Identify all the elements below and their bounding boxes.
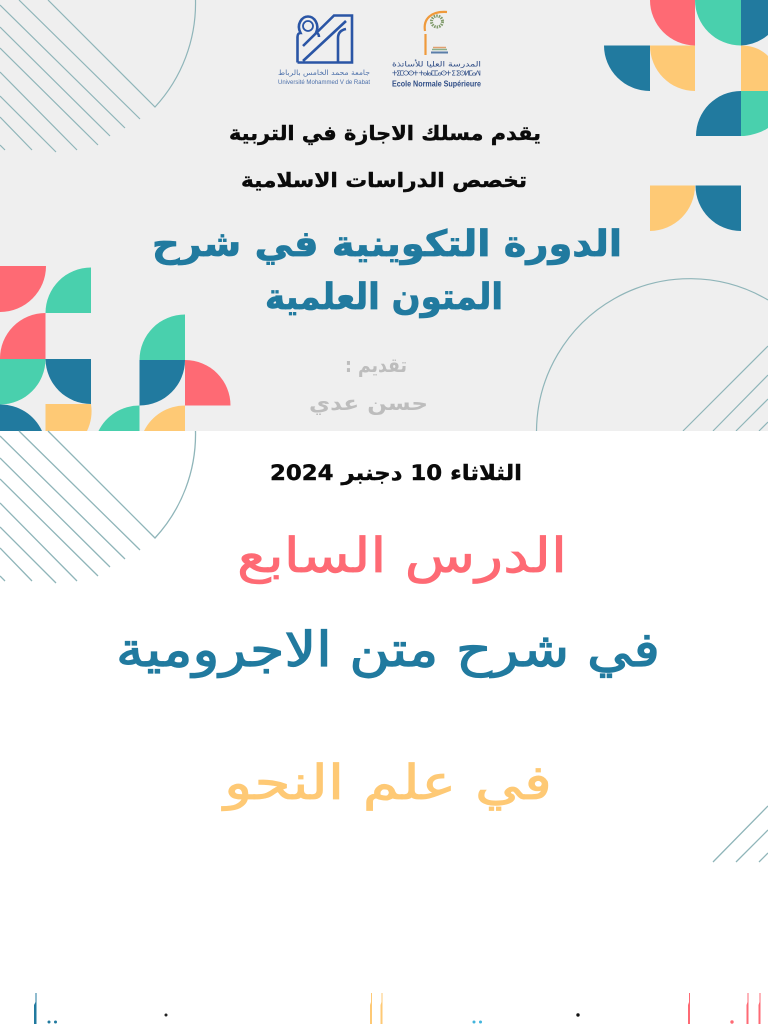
decoration: bottom-right circle and diagonal lines: [536, 279, 768, 431]
heading: seventh lesson: الدرس السابع: [237, 528, 567, 584]
text fragments: cropped next line at page bottom: [34, 993, 760, 1024]
logo mark: [298, 16, 352, 62]
logo French caption: Université Mohammed V de Rabat: [278, 79, 370, 86]
panel: lower white slide: [0, 431, 768, 1024]
decoration: top-right geometric quarter circles: [604, 0, 768, 231]
heading: Ajurrumiyya explanation: في شرح متن الاجرومية: [116, 622, 660, 678]
decoration: top-left circle and diagonal lines: [0, 0, 196, 152]
logo: Ecole Normale Supérieure: [392, 12, 481, 89]
logo French name: Ecole Normale Supérieure: [392, 80, 481, 88]
decoration: right diagonal lines: [713, 806, 768, 862]
text: presenter line 1: يقدم مسلك الاجازة في التربية: [229, 121, 541, 146]
decoration: centre-left geometric quarter circles: [98, 314, 230, 431]
logo Arabic caption: جامعة محمد الخامس بالرباط: [278, 69, 370, 77]
decoration: top-left circle and diagonal lines: [0, 431, 196, 583]
heading: training course title: [152, 224, 622, 318]
text: date: الثلاثاء 10 دجنبر 2024: [270, 461, 522, 485]
text: presenter name: حسن عدي: [309, 391, 428, 416]
text: presenter line 2: تخصص الدراسات الاسلامية: [241, 168, 527, 192]
text: presented by label: تقديم :: [345, 353, 407, 377]
logo Tifinagh name: ⵜⵉⵎⵔⵙⵜ ⵜⴰⵏⴰⵎⵎⴰⵙⵜ ⵉ ⵉⵙⵍⵎⴰⴷⵏ: [392, 70, 481, 78]
panel: top grey slide: [0, 0, 768, 431]
logo: Université Mohammed V de Rabat: [278, 16, 370, 86]
heading: training course title: المتون العلمية: [265, 277, 503, 318]
heading: training course title: الدورة التكوينية في شرح: [152, 224, 622, 265]
logo Arabic name: المدرسة العليا للأساتذة: [392, 58, 481, 68]
logo arc and pillar: [425, 12, 448, 55]
decoration: left geometric quarter circles: [0, 266, 92, 431]
heading: grammar science: في علم النحو: [222, 755, 552, 811]
